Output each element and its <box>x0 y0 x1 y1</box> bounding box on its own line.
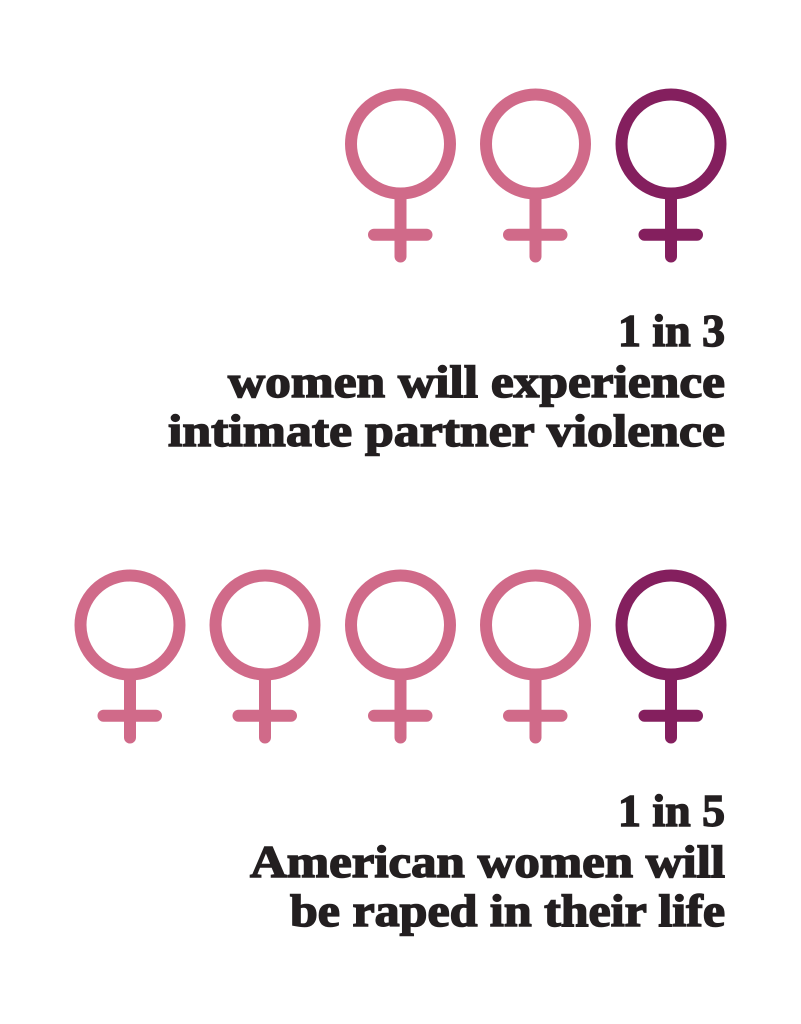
icon: female symbol dark <box>622 576 720 738</box>
icon: female symbol light 3 <box>351 576 450 738</box>
icon row: three female symbols <box>351 94 720 256</box>
icon row: five female symbols <box>80 576 720 738</box>
text: 1 in 5 caption: 1 in 5 <box>618 785 725 836</box>
text: 1 in 5 caption: American women will <box>250 836 725 887</box>
icon: female symbol light 2 <box>216 576 314 738</box>
text: 1 in 5 caption: be raped in their life <box>290 885 725 936</box>
text: 1 in 3 caption: women will experience <box>228 356 725 407</box>
icon: female symbol dark <box>622 94 720 256</box>
text: 1 in 3 caption: 1 in 3 <box>618 305 725 356</box>
icon: female symbol light 2 <box>486 94 585 256</box>
icon: female symbol light 4 <box>486 576 585 738</box>
icon: female symbol light 1 <box>80 576 180 738</box>
panel: 1 in 3 statistic <box>168 94 725 456</box>
text: 1 in 5 caption <box>250 785 725 936</box>
text: 1 in 3 caption: intimate partner violence <box>168 405 725 456</box>
panel: 1 in 5 statistic <box>80 576 725 936</box>
icon: female symbol light 1 <box>351 94 450 256</box>
text: 1 in 3 caption <box>168 305 725 456</box>
